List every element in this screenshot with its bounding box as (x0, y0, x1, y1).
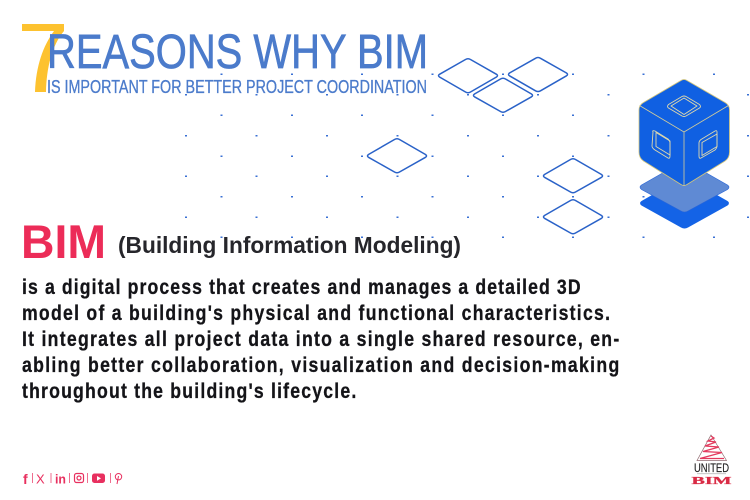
translucent upper plate (640, 162, 729, 212)
cube body (639, 80, 730, 186)
icon: pinterest (115, 474, 122, 484)
logo wordmark United: UNITED (694, 461, 729, 475)
logo triangle mark (697, 435, 726, 460)
cube edges (640, 106, 728, 186)
heading: BIM: BIM (21, 215, 106, 268)
logo wordmark BIM: BIM (692, 475, 733, 487)
body paragraph: throughout the building's lifecycle. (22, 380, 356, 403)
icon: linkedin: in (55, 472, 66, 486)
icon: BIM cube on stacked layers (639, 80, 730, 228)
heading: Building Information Modeling: (Building Information Modeling) (118, 232, 461, 258)
subtitle: IS IMPORTANT FOR BETTER PROJECT COORDINATION (47, 77, 427, 97)
body paragraph: model of a building's physical and functional characteristics. (22, 302, 610, 325)
icon: X: X (36, 472, 45, 486)
icon: large yellow numeral 7 (22, 24, 64, 92)
body paragraph: It integrates all project data into a single shared resource, en- (22, 328, 619, 351)
cube windows (652, 96, 717, 158)
title: REASONS WHY BIM (47, 26, 428, 79)
icon: instagram (74, 474, 84, 482)
logo: United BIM (692, 435, 733, 487)
body paragraph: abling better collaboration, visualization and decision-making (22, 354, 619, 377)
social media icons (23, 471, 122, 487)
icon: facebook: f (23, 471, 28, 487)
lower layer plate (640, 178, 729, 228)
icon: outlined isometric diamonds (368, 58, 602, 234)
body paragraph (22, 276, 619, 403)
body paragraph: is a digital process that creates and manages a detailed 3D (22, 276, 581, 299)
icon: youtube (92, 474, 105, 483)
